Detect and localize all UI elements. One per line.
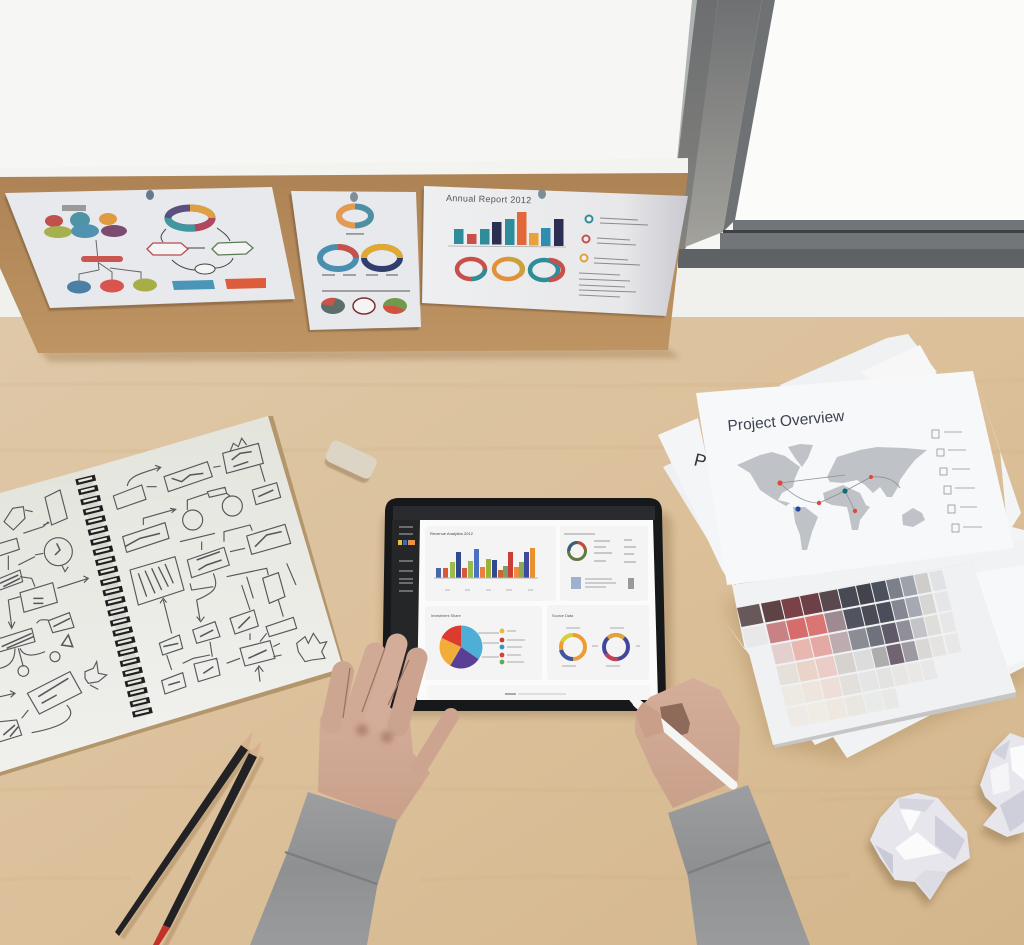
sketches on right page: [113, 438, 327, 694]
corkboard: [0, 158, 688, 362]
tablet shadow: [382, 510, 672, 716]
window ledge: [0, 268, 1024, 318]
tablet body: [382, 498, 666, 711]
tablet top bar: [393, 506, 655, 520]
spiral binding: [85, 477, 144, 720]
tablet: [382, 498, 672, 716]
notebook: [0, 416, 346, 776]
pie chart: [439, 626, 482, 668]
pinned sheet: donuts: [289, 191, 421, 332]
overview sheet: [696, 371, 1014, 585]
overview title: Project Overview: [727, 408, 846, 435]
map legend: [932, 430, 982, 532]
eraser: [323, 439, 379, 485]
finger over stylus: [635, 702, 664, 738]
pencils: [115, 732, 262, 945]
left sleeve: [250, 792, 397, 945]
window frame sill rail: [678, 220, 1024, 268]
panel title: Source Data: [552, 614, 574, 618]
crumpled paper large: [867, 793, 970, 907]
back sheets: [780, 334, 937, 400]
window frame mullion: [677, 0, 775, 268]
panel title: Investment Share: [431, 614, 461, 618]
window pane right: [735, 0, 1024, 222]
tablet sidebar: [390, 520, 420, 700]
left arm and hand: [250, 644, 451, 945]
pie panel: [425, 606, 542, 680]
right arm and hand: [622, 678, 810, 945]
corkboard face: [0, 172, 688, 353]
crumpled paper small: [977, 733, 1024, 844]
partial heading on back sheet: P: [692, 449, 709, 472]
donut panel: [547, 605, 649, 680]
notebook cover edge: [0, 416, 346, 776]
right hand: [635, 678, 740, 808]
right sleeve: [668, 785, 810, 945]
analytics panel: [560, 526, 648, 601]
map pins: [777, 475, 873, 513]
report title: Annual Report 2012: [446, 193, 532, 205]
pencil shadows: [122, 750, 262, 945]
pencil one: [115, 732, 253, 936]
pinned sheet: annual report: [420, 186, 688, 318]
left hand: [318, 644, 451, 822]
corkboard shadow: [38, 348, 680, 362]
sketches on left page: [0, 490, 107, 742]
palette card: [737, 562, 1017, 748]
window backdrop: [0, 0, 1024, 320]
donut charts: [561, 635, 628, 659]
report bar chart: [448, 212, 566, 247]
world map: [737, 444, 927, 550]
chart panel: [425, 526, 556, 601]
map routes: [780, 475, 900, 511]
hand shadow gap: [660, 703, 690, 738]
pencil two: [153, 741, 262, 945]
stacked project papers: [658, 334, 1024, 760]
lower sheet: [724, 540, 1024, 758]
pushpins: [146, 189, 546, 202]
notebook right page: [83, 416, 343, 727]
bottom status panel: [427, 685, 650, 700]
paper stack shadow: [725, 540, 1024, 760]
pie legend: [478, 629, 525, 664]
pinned sheet: flow diagram: [4, 187, 295, 311]
tablet screen: [417, 520, 658, 700]
corkboard top edge: [0, 158, 688, 177]
colour swatches: [737, 570, 972, 732]
notebook left page: [0, 470, 147, 772]
desk surface: [0, 317, 1024, 945]
stylus: [622, 688, 733, 785]
chart title: Revenue Analytics 2012: [430, 531, 474, 536]
